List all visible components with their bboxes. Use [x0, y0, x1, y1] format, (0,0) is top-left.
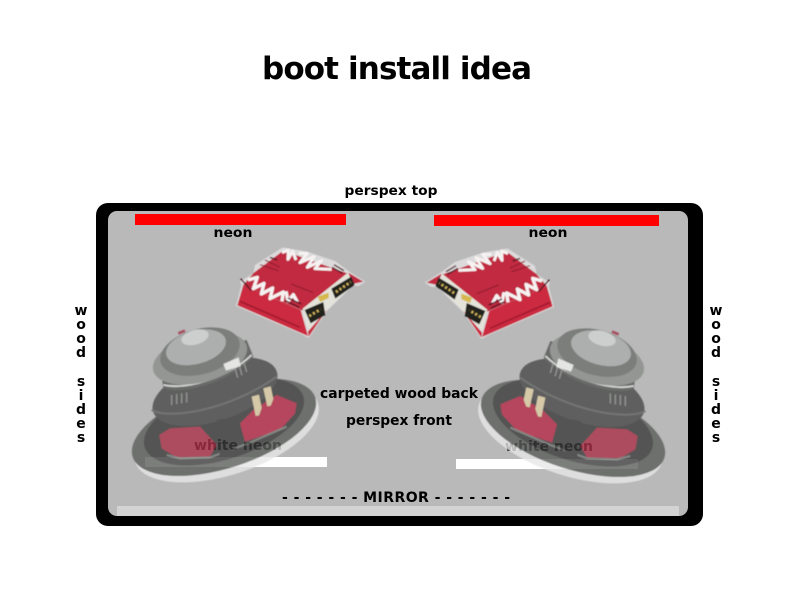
- label: perspex front: perspex front: [346, 413, 452, 429]
- black wood frame: [96, 203, 703, 526]
- label: white neon left: white neon: [194, 438, 282, 454]
- label: wood sides left: d: [76, 402, 86, 418]
- white neon bar left: [145, 457, 327, 467]
- label: wood sides right: s: [712, 430, 720, 446]
- label: wood sides right: [710, 303, 723, 446]
- boot enclosure panel: [96, 203, 703, 526]
- label: wood sides left: o: [76, 331, 86, 347]
- white neon bar right: [456, 459, 638, 469]
- red neon left: [135, 214, 346, 225]
- label: white neon right: white neon: [505, 439, 593, 455]
- label: neon left: neon: [214, 225, 252, 241]
- label: wood sides left: e: [76, 416, 86, 432]
- icon: subwoofer left: [120, 319, 331, 502]
- label: wood sides left: o: [76, 317, 86, 333]
- label: neon right: neon: [528, 225, 568, 241]
- label: mirror: - - - - - - - MIRROR - - - - - - -: [282, 490, 510, 506]
- label: wood sides left: [75, 303, 88, 446]
- label: wood sides right: d: [711, 345, 721, 361]
- red neon right: [434, 215, 659, 226]
- mirror strip: [117, 506, 679, 516]
- label: wood sides right: e: [711, 416, 721, 432]
- label: wood sides right: w: [710, 303, 723, 319]
- label: perspex top: perspex top: [344, 183, 438, 199]
- label: wood sides left: w: [75, 303, 88, 319]
- icon: subwoofer right: [466, 320, 677, 503]
- label: wood sides right: o: [711, 331, 721, 347]
- label: carpeted wood back: carpeted wood back: [320, 386, 479, 402]
- icon: amplifier left: [236, 247, 365, 338]
- title: boot install idea: [262, 51, 532, 87]
- label: wood sides left: d: [76, 345, 86, 361]
- label: wood sides right: d: [711, 402, 721, 418]
- label: wood sides right: i: [714, 388, 718, 404]
- carpeted back panel: [108, 211, 688, 516]
- label: wood sides right: o: [711, 317, 721, 333]
- label: wood sides left: s: [77, 430, 85, 446]
- label: wood sides left: s: [77, 374, 85, 390]
- label: wood sides left: i: [79, 388, 83, 404]
- icon: amplifier right: [425, 248, 554, 339]
- label: wood sides right: s: [712, 374, 720, 390]
